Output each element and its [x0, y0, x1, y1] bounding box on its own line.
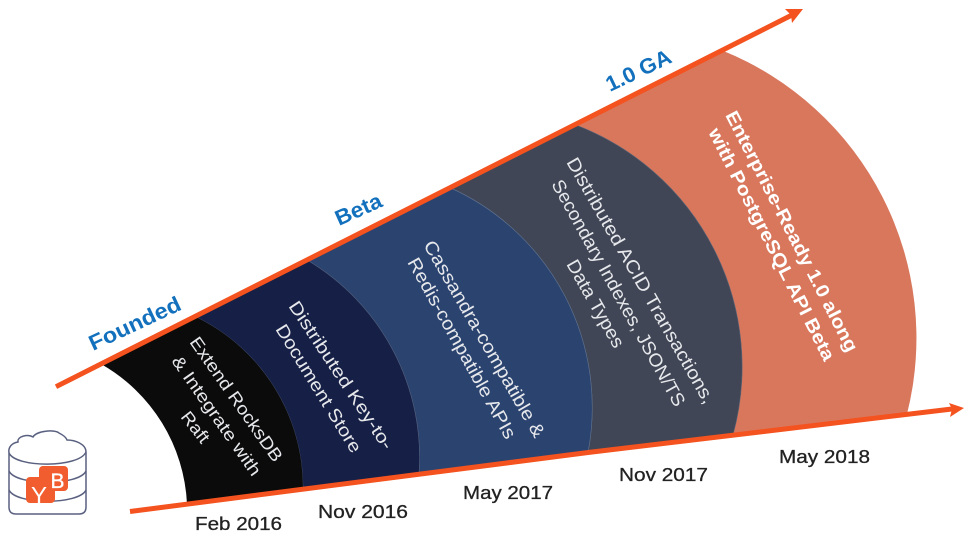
band text: ACID transactions: Distributed ACID Transactions,: [563, 154, 719, 407]
band text: Cassandra and Redis APIs: Redis-compatible APIs: [404, 254, 521, 442]
band: May 2018 enterprise-ready: [575, 50, 916, 435]
icon: YB cloud database: B: [50, 470, 65, 493]
icon: YB cloud database: Y: [31, 482, 47, 510]
date: Feb 2016: Feb 2016: [195, 513, 282, 534]
band: Nov 2016 key-to-document store: [195, 260, 420, 489]
band text: enterprise-ready: with PostgreSQL API Beta: [704, 123, 840, 365]
band: Nov 2017 ACID transactions: [450, 125, 742, 452]
date: May 2018: May 2018: [779, 446, 870, 467]
arrow: lower date axis: [130, 403, 964, 512]
band text: key-to-document store: Distributed Key-to-: [285, 297, 397, 453]
band text: ACID transactions: Data Types: [563, 256, 629, 351]
date: Nov 2017: Nov 2017: [619, 464, 708, 485]
band text: key-to-document store: [272, 297, 397, 456]
band text: enterprise-ready: Enterprise-Ready 1.0 along: [721, 107, 863, 355]
band text: RocksDB and Raft: [168, 333, 287, 480]
label: 1.0 GA: 1.0 GA: [602, 45, 675, 97]
band: Feb 2016 RocksDB and Raft: [101, 316, 303, 504]
arrow: upper milestone axis: [56, 9, 803, 387]
label: Beta: Beta: [331, 188, 387, 231]
icon: YB cloud database: [9, 431, 86, 514]
band: May 2017 Cassandra and Redis APIs: [307, 188, 592, 474]
band text: RocksDB and Raft: Extend RocksDB: [186, 333, 287, 466]
label: Founded: Founded: [85, 292, 185, 356]
band text: RocksDB and Raft: Raft: [177, 407, 214, 447]
band text: key-to-document store: Document Store: [272, 321, 366, 456]
date: Nov 2016: Nov 2016: [318, 501, 408, 522]
date: May 2017: May 2017: [463, 482, 553, 503]
band text: Cassandra and Redis APIs: Cassandra-compatible &: [420, 236, 550, 442]
band text: RocksDB and Raft: & Integrate with: [168, 352, 266, 480]
band text: enterprise-ready: [704, 107, 863, 365]
band text: ACID transactions: Secondary Indexes, JSON/TS: [548, 176, 690, 410]
